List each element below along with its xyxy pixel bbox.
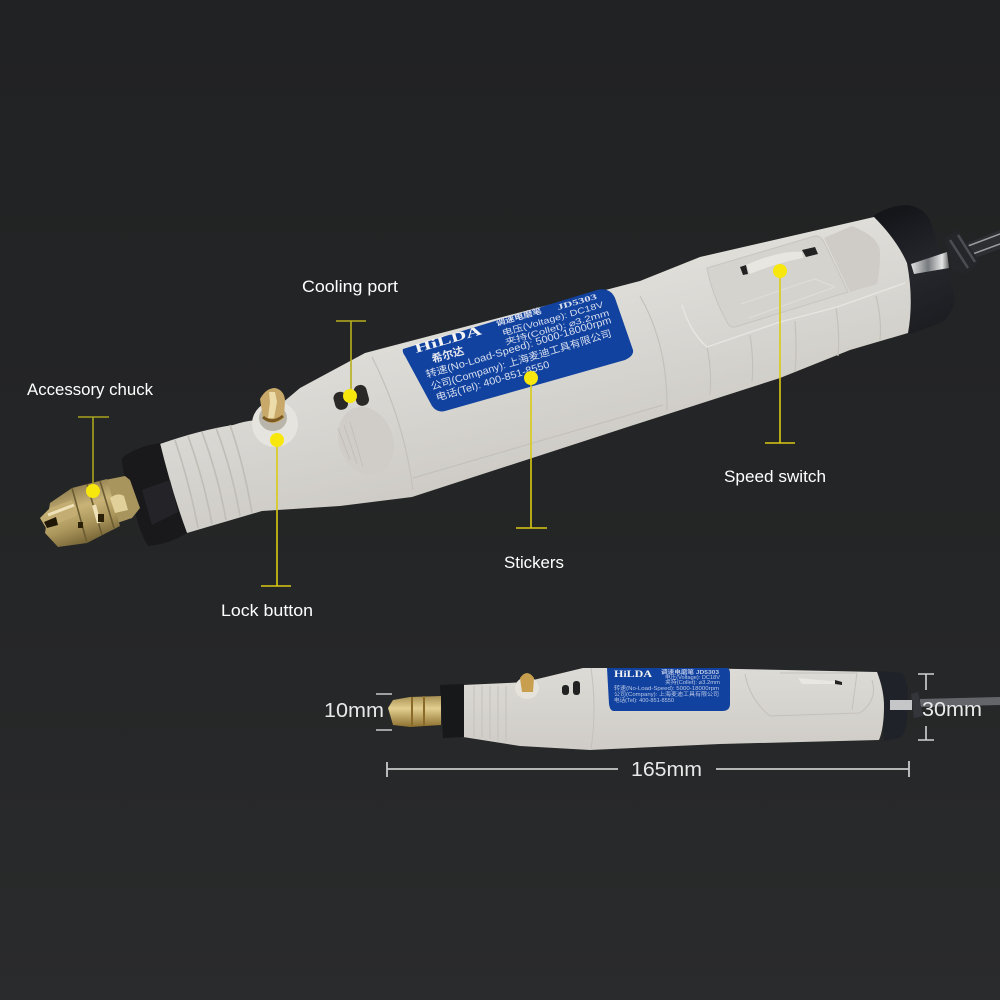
callout: speed switch xyxy=(724,264,826,486)
sticker specs: 电话(Tel): 400-851-8550 xyxy=(434,358,551,404)
small body xyxy=(463,668,884,750)
callout: speed switch: Speed switch xyxy=(724,467,826,486)
dimension: 165mm xyxy=(387,759,909,781)
small blue sticker: 调速电磨笔 JD5303 xyxy=(661,668,719,676)
power cord xyxy=(944,230,1000,274)
body seams xyxy=(372,296,880,490)
dimension: 30mm xyxy=(918,674,982,740)
dimension: 10mm: 10mm xyxy=(324,700,384,722)
sticker specs: 公司(Company): 上海麦迪工具有限公司 xyxy=(429,327,613,393)
sticker specs: 夹持(Collet): ⌀3.2mm xyxy=(504,308,610,347)
callout: lock button: Lock button xyxy=(221,601,313,620)
small lock button xyxy=(515,677,539,699)
callout: accessory chuck xyxy=(27,380,153,498)
rear black cap xyxy=(873,205,954,334)
sticker specs: 调速电磨笔 xyxy=(495,305,543,328)
small blue sticker: 夹持(Collet): ⌀3.2mm xyxy=(665,678,720,686)
callout: cooling port xyxy=(302,277,398,403)
small body details xyxy=(474,668,874,749)
cooling vents xyxy=(332,384,370,411)
thumb grip xyxy=(329,399,403,483)
front black collar xyxy=(122,443,187,546)
main rotary tool xyxy=(40,205,1000,547)
brass chuck xyxy=(40,476,140,547)
small rotary tool xyxy=(388,668,1000,750)
lock button xyxy=(252,388,298,447)
sticker specs: 转速(No-Load-Speed): 5000-18000rpm xyxy=(424,313,613,381)
sticker specs xyxy=(424,292,613,404)
dimension: 165mm: 165mm xyxy=(631,759,702,781)
small cord xyxy=(920,697,1000,707)
small blue sticker xyxy=(607,668,730,711)
callout: lock button xyxy=(221,433,313,620)
small chuck xyxy=(388,696,441,727)
dimension: 30mm: 30mm xyxy=(922,699,982,721)
neck ridges xyxy=(175,425,252,528)
blue sticker: 希尔达 xyxy=(430,343,466,366)
callout: stickers: Stickers xyxy=(504,553,564,572)
switch panel xyxy=(707,236,848,327)
callout: cooling port: Cooling port xyxy=(302,277,398,296)
raised ridge line xyxy=(682,283,905,347)
speed switch slider xyxy=(740,247,818,275)
blue sticker xyxy=(403,289,633,411)
recess shading xyxy=(824,226,880,292)
sticker specs: 电压(Voltage): DC18V xyxy=(501,299,605,338)
callout: accessory chuck: Accessory chuck xyxy=(27,380,153,399)
small collar xyxy=(440,684,464,738)
dimension: 10mm xyxy=(324,694,392,730)
small blue sticker: 转速(No-Load-Speed): 5000-18000rpm xyxy=(614,684,719,692)
small blue sticker: 电话(Tel): 400-851-8550 xyxy=(614,696,674,704)
sticker specs: JD5303 xyxy=(556,292,598,312)
small blue sticker: 电压(Voltage): DC18V xyxy=(665,673,720,681)
small rear cap xyxy=(878,671,908,741)
callout: stickers xyxy=(504,371,564,572)
small blue sticker: 公司(Company): 上海麦迪工具有限公司 xyxy=(614,690,719,698)
white tool body xyxy=(160,217,911,533)
sticker brand: HiLDA xyxy=(413,322,484,356)
small blue sticker: HiLDA xyxy=(614,669,653,679)
small vents xyxy=(562,681,580,695)
